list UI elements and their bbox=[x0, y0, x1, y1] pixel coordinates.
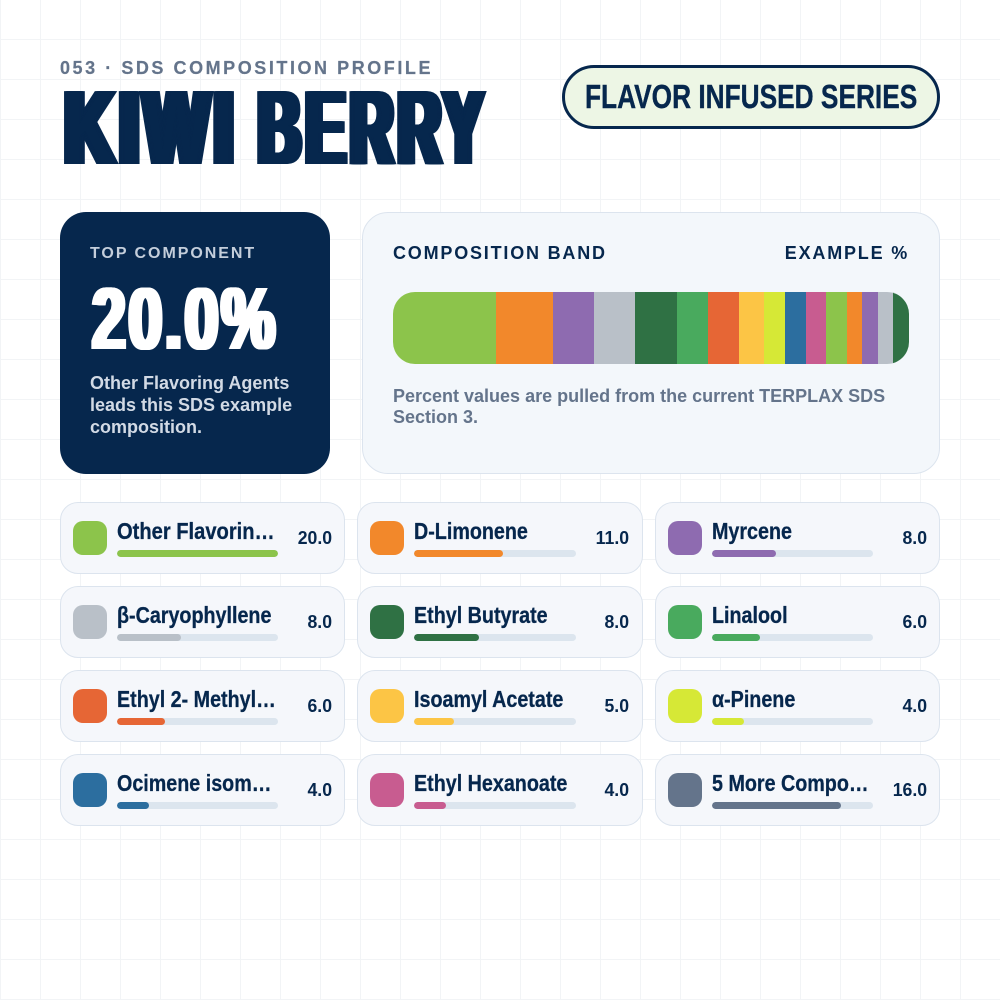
card: Ethyl Butyrate: 8.0 bbox=[605, 612, 630, 632]
title: BERRY bbox=[258, 69, 488, 187]
series badge bbox=[562, 65, 940, 129]
card: Other Flavoring Agents: 20.0 bbox=[298, 528, 332, 548]
card: D-Limonene bbox=[357, 502, 642, 574]
card: Ethyl 2-Methyl: 6.0 bbox=[307, 696, 332, 716]
card: Ethyl 2-Methyl: Ethyl 2- Methyl… bbox=[117, 686, 276, 712]
card: Ethyl 2-Methyl bbox=[60, 670, 345, 742]
panel: composition band bbox=[362, 212, 940, 474]
card: Isoamyl Acetate: Isoamyl Acetate bbox=[414, 686, 563, 712]
eyebrow: 053 · SDS COMPOSITION PROFILE bbox=[60, 58, 433, 78]
card: Ethyl Hexanoate: 4.0 bbox=[605, 780, 630, 800]
stacked band chart bbox=[393, 292, 909, 364]
title bbox=[64, 69, 488, 187]
card: alpha-Pinene bbox=[655, 670, 940, 742]
band unit label: EXAMPLE % bbox=[785, 243, 909, 263]
top component description: Other Flavoring Agents leads this SDS example composition. bbox=[90, 373, 292, 437]
card: 5 More Components: 16.0 bbox=[893, 780, 927, 800]
card: alpha-Pinene: 4.0 bbox=[902, 696, 927, 716]
card: beta-Caryophyllene bbox=[60, 586, 345, 658]
card: Linalool: 6.0 bbox=[902, 612, 927, 632]
card: Other Flavoring Agents: Other Flavorin… bbox=[117, 518, 275, 544]
card: Myrcene bbox=[655, 502, 940, 574]
card: Ethyl Butyrate: Ethyl Butyrate bbox=[414, 602, 548, 628]
card: 5 More Components: 5 More Compo… bbox=[712, 770, 869, 796]
band note: Percent values are pulled from the current TERPLAX SDS Section 3. bbox=[393, 386, 885, 427]
card: Ethyl Hexanoate bbox=[357, 754, 642, 826]
card: 5 More Components bbox=[655, 754, 940, 826]
top component label: TOP COMPONENT bbox=[90, 245, 256, 262]
card: alpha-Pinene: α-Pinene bbox=[712, 686, 795, 712]
band heading: COMPOSITION BAND bbox=[393, 243, 607, 263]
badge label: FLAVOR INFUSED SERIES bbox=[585, 78, 917, 115]
card: D-Limonene: D-Limonene bbox=[414, 518, 528, 544]
card: Other Flavoring Agents bbox=[60, 502, 345, 574]
card: beta-Caryophyllene: β-Caryophyllene bbox=[117, 602, 271, 628]
card: Ocimene isomers bbox=[60, 754, 345, 826]
card: Myrcene: 8.0 bbox=[902, 528, 927, 548]
card: Ethyl Butyrate bbox=[357, 586, 642, 658]
card: beta-Caryophyllene: 8.0 bbox=[307, 612, 332, 632]
card: Myrcene: Myrcene bbox=[712, 518, 792, 544]
top component value: 20.0% bbox=[92, 269, 278, 368]
card: Ethyl Hexanoate: Ethyl Hexanoate bbox=[414, 770, 567, 796]
card: Isoamyl Acetate bbox=[357, 670, 642, 742]
card: Isoamyl Acetate: 5.0 bbox=[605, 696, 630, 716]
panel: top component bbox=[60, 212, 330, 474]
card: Linalool bbox=[655, 586, 940, 658]
card: Ocimene isomers: 4.0 bbox=[307, 780, 332, 800]
title: KIWI bbox=[65, 69, 239, 187]
card: D-Limonene: 11.0 bbox=[596, 528, 630, 548]
card: Ocimene isomers: Ocimene isom… bbox=[117, 770, 271, 796]
card: Linalool: Linalool bbox=[712, 602, 788, 628]
